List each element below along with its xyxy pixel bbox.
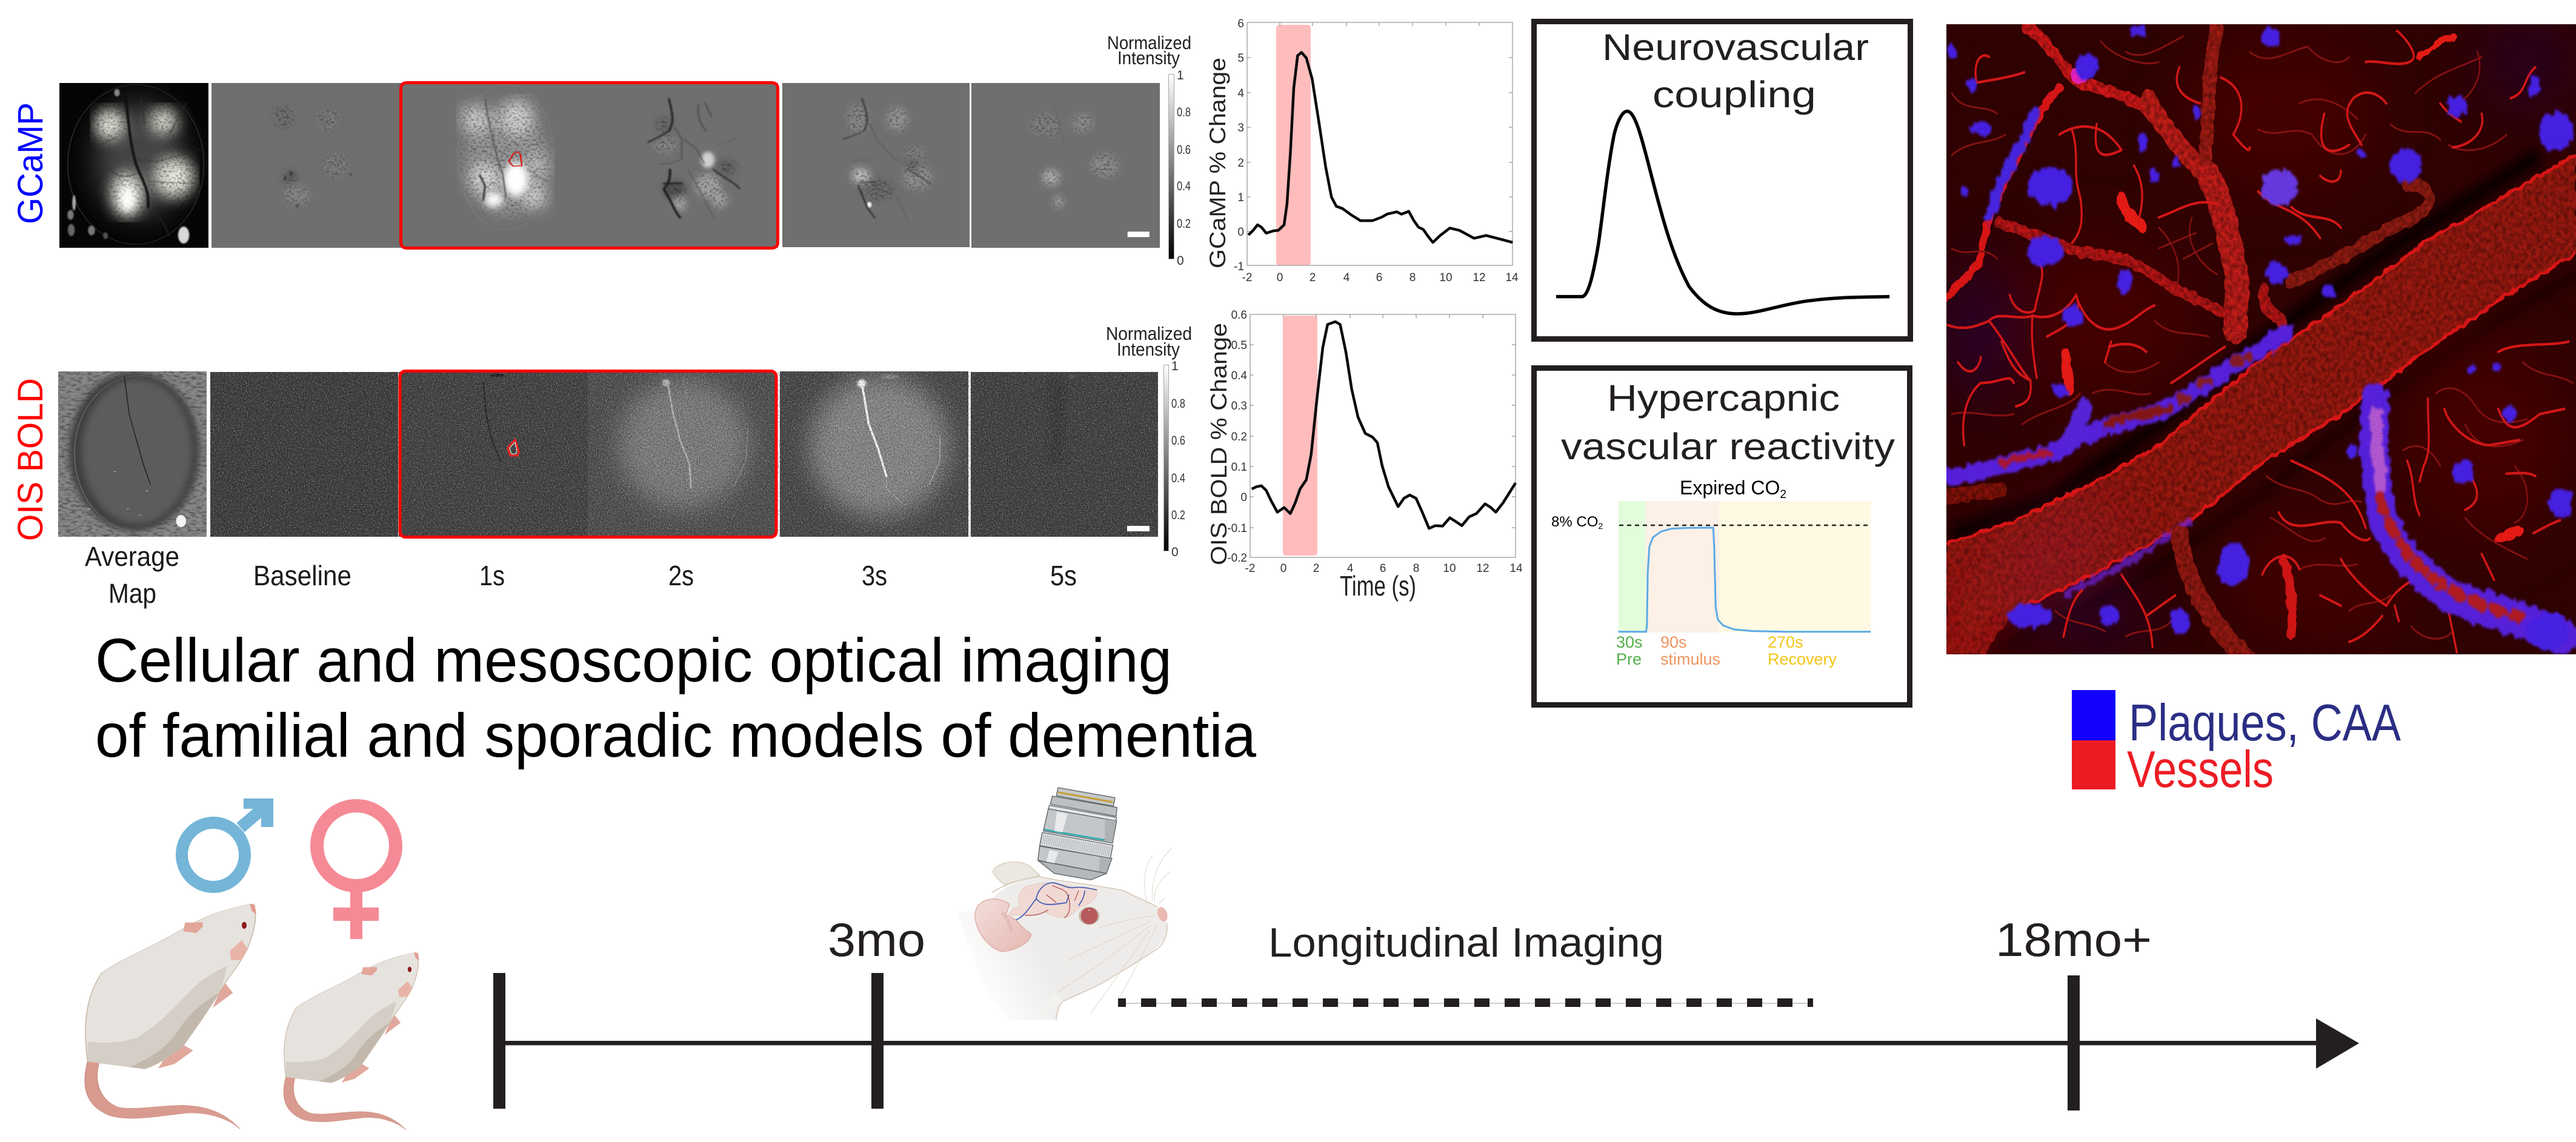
tick labels: 2 [1237, 157, 1244, 170]
colour bar: OIS BOLD: 0.4 [1171, 471, 1185, 485]
tick labels: -0.1 [1227, 522, 1247, 535]
label: plaques: Plaques, CAA [2129, 694, 2401, 752]
line chart: GCaMP % change [1205, 18, 1519, 284]
region of interest outline [509, 151, 522, 166]
icon: large rat [85, 904, 256, 1129]
tick labels [1234, 18, 1519, 284]
timeline [493, 913, 2359, 1110]
microscope objective [1038, 788, 1117, 880]
tick labels: 8 [1409, 271, 1416, 284]
swatch: plaques [2072, 690, 2115, 740]
label: longitudinal imaging: Longitudinal Imaging [1268, 920, 1664, 966]
panel: hypercapnic vascular reactivity [1534, 368, 1910, 705]
colour bar: GCaMP [1168, 68, 1191, 268]
chart title: Expired CO [1680, 477, 1780, 499]
colour bar title: OIS BOLD: Intensity [1117, 339, 1180, 360]
heading [1602, 27, 1869, 115]
GCaMP image row [59, 82, 1160, 248]
heading: vascular reactivity [1561, 426, 1895, 467]
phase labels: Recovery [1768, 650, 1837, 668]
OIS scale bar [1127, 526, 1150, 531]
large diagonal vessel [1935, 155, 2576, 654]
nose [1156, 906, 1170, 923]
tick: 3 months [871, 973, 884, 1109]
colour bar: GCaMP: 1 [1177, 68, 1184, 82]
colour bar: GCaMP: 0 [1177, 254, 1184, 268]
colour bar title: GCaMP: Normalized [1107, 32, 1191, 53]
time-point labels: Map [108, 578, 156, 609]
time-point labels: 2s [668, 560, 694, 591]
stimulus window [1283, 316, 1317, 556]
tick labels: 6 [1376, 271, 1382, 284]
tick labels: 3 [1237, 122, 1244, 134]
OIS BOLD image row [58, 371, 1158, 537]
tick labels: -2 [1245, 562, 1255, 575]
time-point labels: Baseline [253, 560, 351, 591]
tick labels: 0 [1237, 226, 1244, 239]
tick labels: 4 [1237, 87, 1244, 100]
label: 3mo: 3mo [828, 913, 925, 966]
colour bar: GCaMP: 0.2 [1177, 217, 1191, 231]
colour bar title: GCaMP [1107, 32, 1191, 68]
colour bar: GCaMP: 0.4 [1177, 179, 1191, 193]
GCaMP 1s [399, 83, 589, 248]
tick labels: 0.2 [1231, 431, 1247, 443]
GCaMP 2s [589, 83, 778, 248]
colour bar: OIS BOLD: 0.8 [1171, 397, 1185, 411]
heading: Neurovascular [1602, 27, 1869, 68]
tick labels: 0.1 [1231, 461, 1247, 474]
tick labels: -1 [1234, 261, 1244, 273]
tick labels: 14 [1505, 271, 1519, 284]
dashed imaging period [1118, 998, 1813, 1007]
objective details [1041, 792, 1116, 872]
time-point labels: 5s [1050, 560, 1077, 591]
tick labels: 5 [1237, 52, 1244, 65]
microscopy image: plaques, CAA and vessels [1935, 24, 2576, 657]
phase labels: stimulus [1660, 650, 1720, 668]
tick: 18 months [2068, 975, 2080, 1110]
colour bar: GCaMP: 0.6 [1177, 143, 1191, 157]
thick branching vessels [1946, 28, 2430, 657]
colour bar title: GCaMP: Intensity [1117, 47, 1180, 68]
target label: 8% CO [1551, 514, 1598, 530]
line chart: OIS BOLD % change [1206, 309, 1523, 602]
phase labels: Pre [1616, 650, 1642, 668]
colour bar: OIS BOLD: 0.6 [1171, 434, 1185, 448]
OIS region of interest [508, 440, 519, 456]
row label: GCaMP: GCaMP [11, 102, 50, 224]
colour bar: OIS BOLD: 1 [1171, 359, 1179, 373]
tick labels: 1 [1237, 191, 1244, 204]
CAA-laden vessels [1946, 65, 2564, 637]
dim background capillaries [1952, 36, 2573, 639]
panel: neurovascular coupling [1534, 22, 1910, 339]
y-axis title: OIS BOLD % Change [1206, 323, 1231, 565]
fine speckle [1946, 24, 2576, 654]
speckle noise over OIS panels [210, 372, 1158, 537]
colour bar: GCaMP: 0.8 [1177, 105, 1191, 119]
haemodynamic response curve [1556, 111, 1889, 314]
OIS BOLD 3s [780, 371, 968, 537]
mouse head [957, 862, 1167, 1020]
GCaMP baseline [211, 83, 399, 248]
title: Cellular and mesoscopic optical imaging [95, 626, 1172, 695]
colour bar: OIS BOLD [1163, 359, 1185, 559]
tick labels: 4 [1347, 562, 1354, 575]
tick labels: 10 [1443, 562, 1456, 575]
GCaMP trace [1248, 52, 1513, 242]
tick labels: 10 [1439, 271, 1453, 284]
time-point labels [85, 541, 1077, 609]
icon: small rat [284, 952, 419, 1130]
heading [1561, 377, 1895, 467]
row label: OIS BOLD: OIS BOLD [11, 378, 50, 541]
label: vessels: Vessels [2127, 741, 2274, 798]
colour bar title: OIS BOLD: Normalized [1106, 323, 1192, 344]
tick labels: 6 [1380, 562, 1386, 575]
tick labels: 0.6 [1231, 309, 1247, 322]
OIS BOLD 1s [399, 372, 588, 537]
heading: coupling [1652, 74, 1816, 115]
colour bar: OIS BOLD: 0 [1171, 545, 1179, 559]
time-point labels: Average [85, 541, 179, 572]
phase labels: 90s [1660, 633, 1687, 651]
GCaMP 3s [782, 83, 970, 247]
tick labels: 12 [1473, 271, 1486, 284]
time-point labels: 1s [479, 560, 505, 591]
tick labels: 8 [1413, 562, 1419, 575]
arrowhead [2316, 1018, 2359, 1069]
swatch: vessels [2072, 740, 2115, 789]
GCaMP highlight frame [401, 82, 778, 248]
tick labels: 0.3 [1231, 400, 1247, 413]
tick labels: -2 [1242, 271, 1252, 284]
icon: female symbol [317, 806, 396, 939]
dark channels alongside the large vessel [1952, 155, 2576, 649]
brain and vasculature [1007, 883, 1097, 920]
GCaMP average map [59, 83, 208, 248]
tick labels: 4 [1343, 271, 1350, 284]
chart title: 2 [1780, 488, 1786, 501]
tick labels [1227, 309, 1523, 575]
expired CO2 chart [1618, 501, 1871, 632]
tick labels: 12 [1476, 562, 1489, 575]
OIS BOLD 2s [588, 372, 776, 537]
tick labels: -0.2 [1227, 552, 1247, 565]
main axis [499, 1044, 2317, 1046]
title: of familial and sporadic models of dementia [95, 701, 1256, 770]
OIS highlight frame [400, 371, 776, 537]
legend [2072, 690, 2401, 798]
scale bar [1128, 231, 1150, 237]
title [95, 626, 1256, 770]
phase labels: 270s [1768, 633, 1803, 651]
tick labels: 0.5 [1231, 339, 1247, 352]
tick labels: 0 [1277, 271, 1283, 284]
OIS BOLD 5s [971, 372, 1158, 537]
tick labels: 14 [1509, 562, 1523, 575]
colour bar title: OIS BOLD [1106, 323, 1192, 360]
tick labels: 0 [1240, 491, 1247, 504]
phase labels [1616, 633, 1837, 668]
colour bar: OIS BOLD: 0.2 [1171, 508, 1185, 522]
tick labels: 2 [1310, 271, 1316, 284]
y-axis title: GCaMP % Change [1205, 58, 1230, 268]
icon: mouse head with cranial window under microscope objective [957, 788, 1171, 1020]
heading: Hypercapnic [1607, 377, 1840, 419]
thin capillary network [1948, 31, 2569, 652]
stimulus window [1276, 25, 1311, 265]
tick: start [493, 973, 505, 1109]
OIS BOLD trace [1252, 322, 1516, 528]
phase labels: 30s [1616, 633, 1643, 651]
tick labels: 6 [1237, 18, 1244, 30]
x-axis title: Time (s) [1340, 570, 1416, 602]
icon: male symbol [182, 798, 273, 887]
tick labels: 0.4 [1231, 370, 1247, 382]
GCaMP 5s [971, 83, 1160, 248]
ear [975, 899, 1031, 952]
OIS BOLD average map [58, 371, 207, 537]
eye [1079, 907, 1100, 925]
time-point labels: 3s [862, 560, 887, 591]
amyloid plaques [1948, 25, 2574, 649]
tick labels: 2 [1313, 562, 1319, 575]
label: 18mo+: 18mo+ [1995, 913, 2152, 966]
tick labels: 0 [1280, 562, 1286, 575]
OIS BOLD baseline [210, 372, 398, 537]
target label: 2 [1598, 521, 1603, 531]
whiskers [1059, 848, 1171, 1014]
